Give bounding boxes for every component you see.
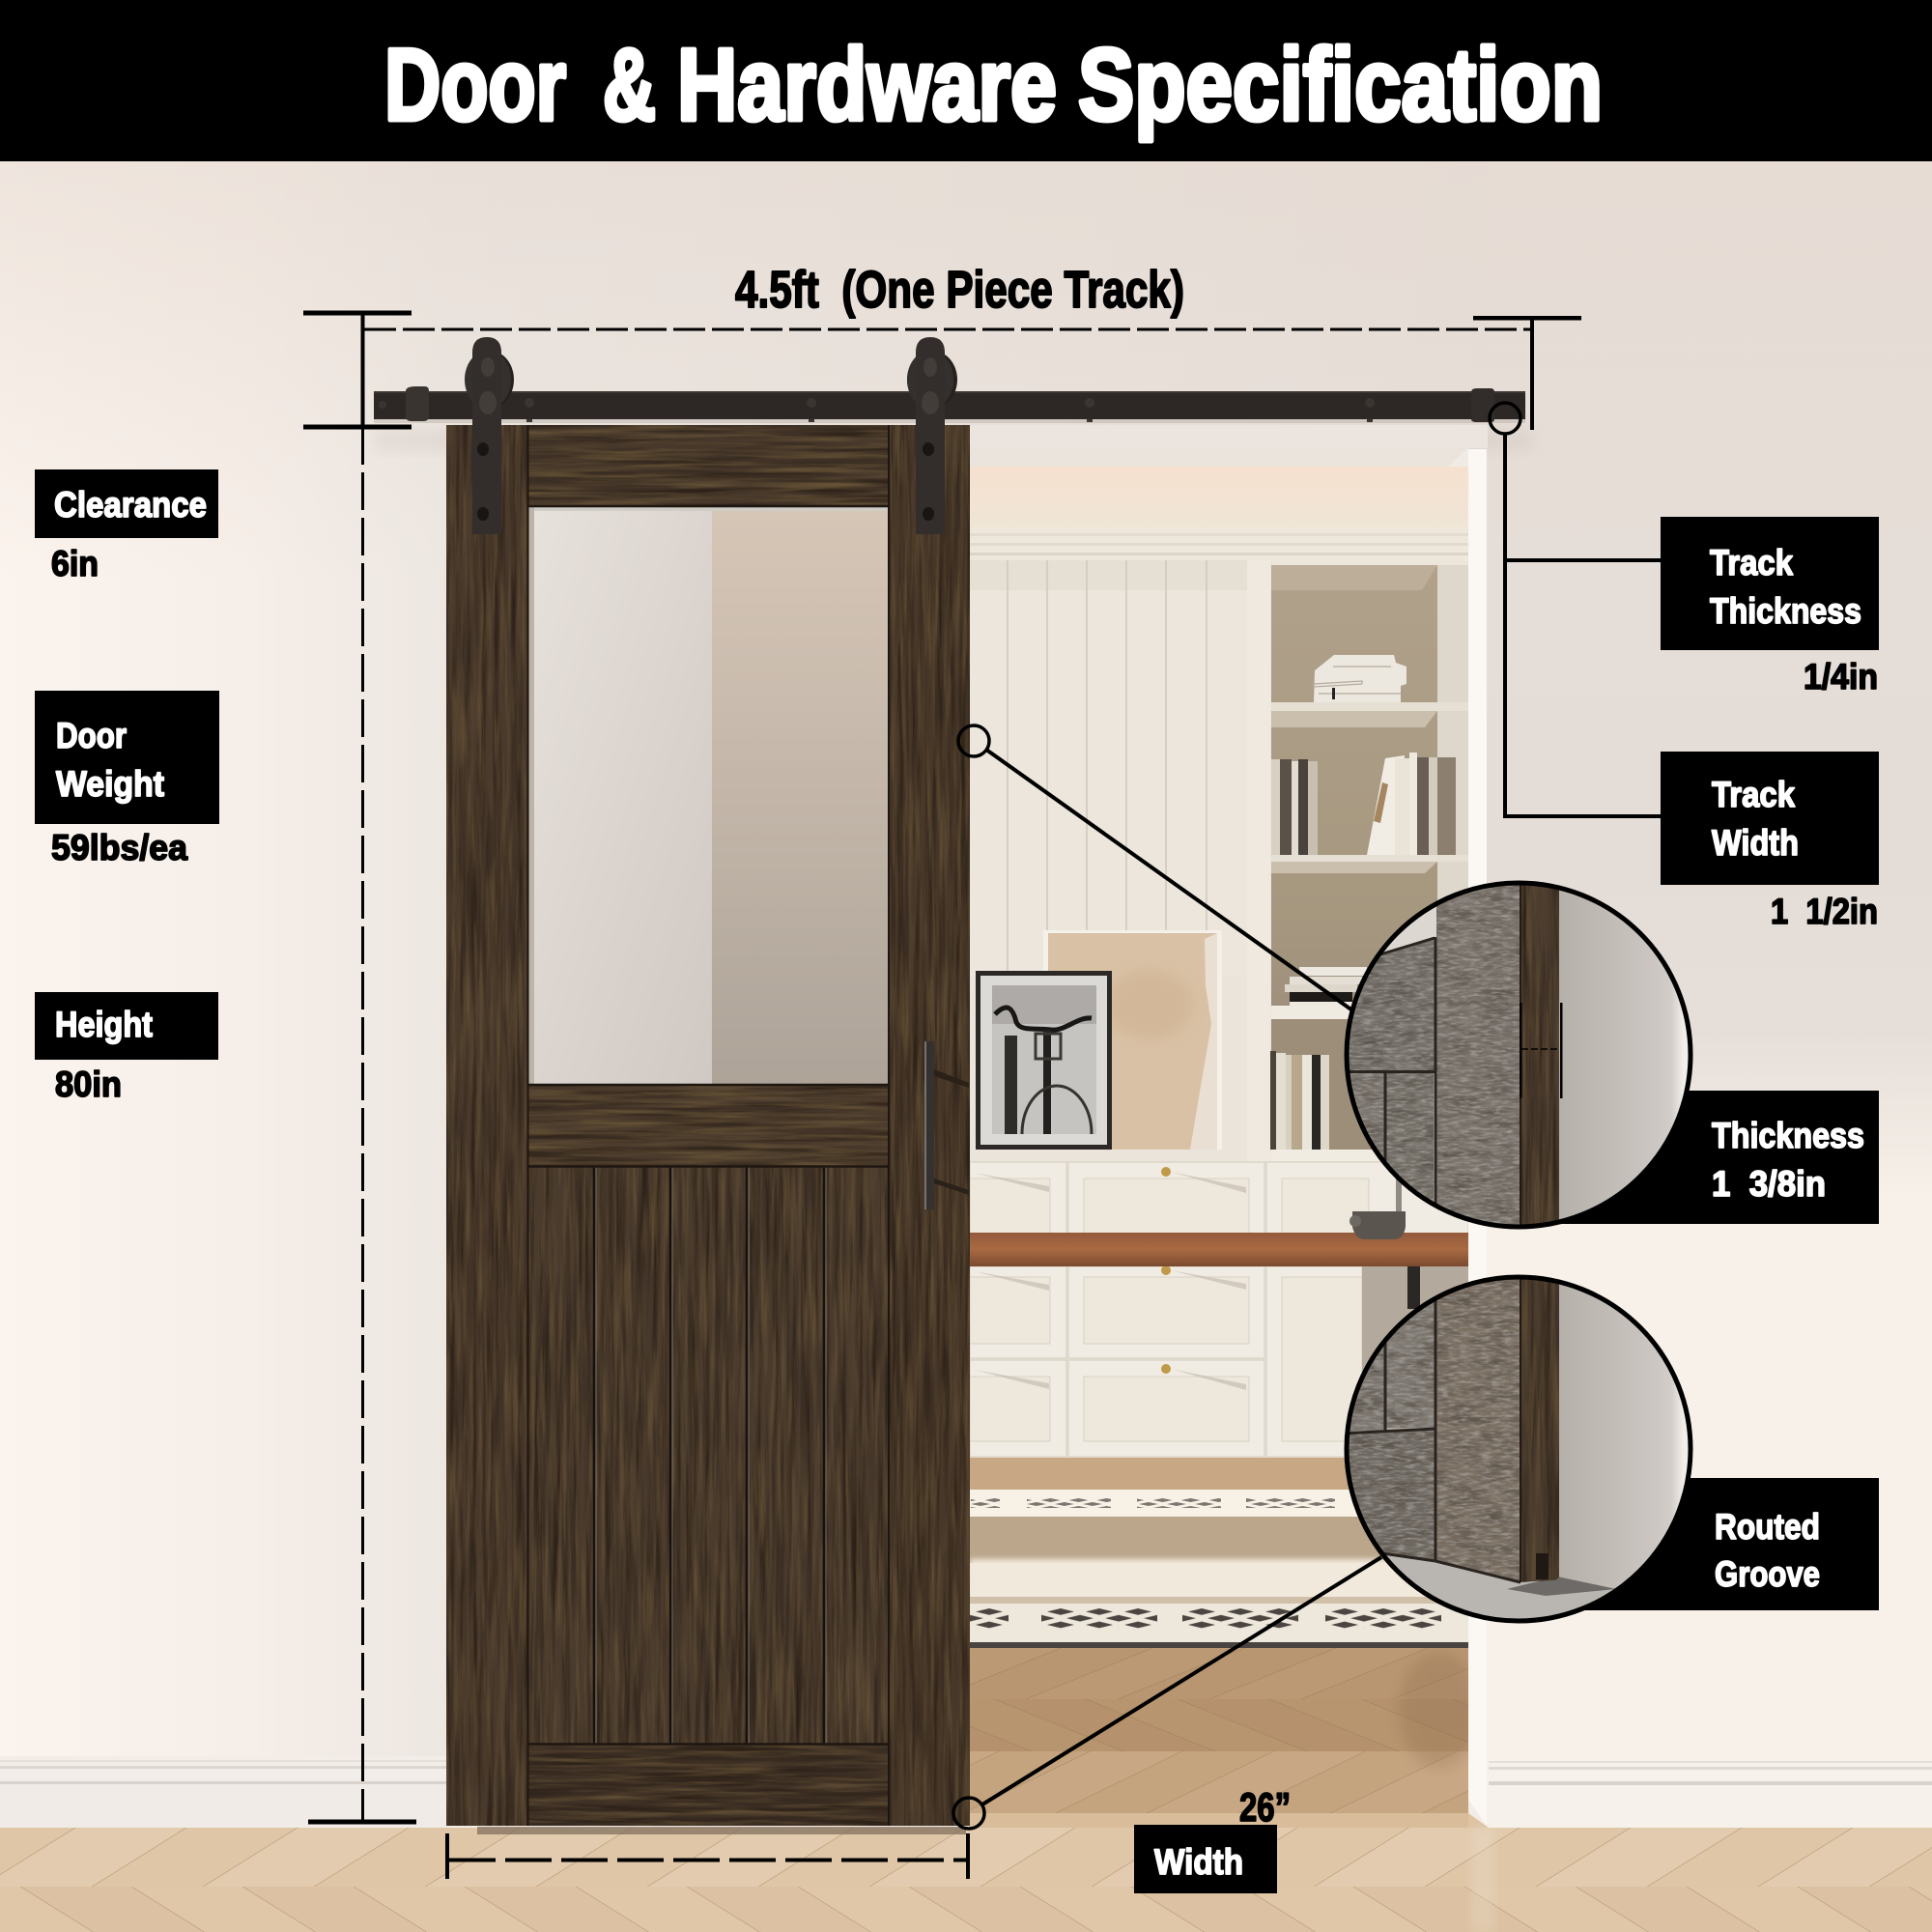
track stops bbox=[406, 386, 429, 421]
label: clearance: Clearance bbox=[54, 485, 207, 525]
label: width: 26” bbox=[1239, 1784, 1291, 1830]
header band bbox=[0, 0, 1932, 161]
title: Hardware bbox=[677, 28, 1057, 142]
label: clearance bbox=[35, 469, 218, 583]
track marker circle and leader lines bbox=[1490, 403, 1661, 818]
label: track width bbox=[1661, 752, 1879, 931]
grey stile bbox=[1436, 1273, 1520, 1582]
beadboard wall bbox=[1007, 560, 1208, 971]
title: Door bbox=[384, 28, 566, 142]
routed groove marker circle and leader bbox=[953, 1557, 1381, 1829]
barn door bbox=[446, 425, 970, 1826]
door handle bbox=[924, 1041, 969, 1209]
text: thickness: Thickness bbox=[1712, 1116, 1864, 1155]
thickness dimension marks bbox=[1520, 1003, 1563, 1098]
room interior seen through the opening bbox=[970, 447, 1480, 1828]
text: routed groove: Routed bbox=[1715, 1507, 1820, 1547]
label: track thickness: 1/4in bbox=[1804, 657, 1878, 696]
door slab bbox=[446, 425, 970, 1826]
rug bbox=[970, 1490, 1468, 1648]
left hanger strap bbox=[465, 337, 514, 534]
baseboard right bbox=[1489, 1758, 1932, 1828]
label: height bbox=[35, 992, 218, 1104]
label: height: Height bbox=[55, 1005, 153, 1044]
grey stile bbox=[1436, 879, 1520, 1232]
label: door weight: Weight bbox=[56, 764, 164, 804]
lower cabinets bbox=[970, 1161, 1468, 1460]
title bbox=[384, 28, 1603, 142]
label box: thickness bbox=[1546, 1091, 1879, 1224]
beige framed art bbox=[1043, 930, 1222, 1150]
text: thickness: 1 3/8in bbox=[1712, 1164, 1826, 1204]
track length label: 4.5ft (One Piece Track) bbox=[735, 261, 1184, 319]
wooden counter bbox=[970, 1233, 1468, 1266]
label: width bbox=[1134, 1784, 1291, 1893]
label: door weight bbox=[35, 691, 219, 867]
interior floor bbox=[970, 1458, 1480, 1828]
label: track thickness: Thickness bbox=[1710, 591, 1861, 631]
label: track thickness: Track bbox=[1710, 543, 1793, 582]
dimension: door height bbox=[303, 313, 416, 1824]
text: routed groove bbox=[1715, 1507, 1820, 1594]
door edge bbox=[1520, 1273, 1559, 1582]
framed bicycle photo bbox=[976, 971, 1112, 1150]
dimension: door width bbox=[445, 1833, 970, 1879]
vertical planks bbox=[528, 1167, 889, 1744]
detail circle: door thickness bbox=[1343, 879, 1695, 1232]
bookcase light side panel bbox=[1247, 560, 1270, 1161]
left stile bbox=[446, 425, 527, 1826]
label: clearance: 6in bbox=[51, 544, 99, 583]
routed groove notch bbox=[1536, 1553, 1548, 1579]
text: routed groove: Groove bbox=[1715, 1554, 1820, 1594]
label: door weight: 59lbs/ea bbox=[51, 828, 187, 867]
dimension: track length bbox=[303, 311, 1581, 430]
grey panels bbox=[1343, 1273, 1385, 1432]
label: track thickness bbox=[1661, 517, 1879, 696]
grey panels bbox=[1343, 938, 1435, 1070]
floor bbox=[0, 1813, 1932, 1932]
middle rail bbox=[528, 1085, 888, 1166]
text: thickness bbox=[1712, 1116, 1864, 1204]
detail circle: routed groove bbox=[1343, 1273, 1694, 1628]
glass panel bbox=[528, 506, 889, 1084]
track rail bbox=[374, 386, 1525, 423]
track bolts bbox=[379, 398, 1375, 422]
door edge bbox=[1520, 879, 1559, 1232]
thickness marker circle and leader bbox=[958, 725, 1352, 1010]
grey bowl bbox=[1350, 1140, 1406, 1239]
soffit and warm ceiling bbox=[970, 467, 1468, 555]
label: width: Width bbox=[1154, 1842, 1243, 1882]
door jamb bbox=[970, 425, 1488, 1826]
baseboard left bbox=[0, 1756, 446, 1828]
label: track width: Width bbox=[1712, 823, 1799, 863]
bottom rail bbox=[528, 1745, 889, 1826]
label: track width: Track bbox=[1712, 775, 1795, 814]
top rail bbox=[528, 425, 889, 506]
bookcase bbox=[1270, 565, 1468, 1150]
label: track width: 1 1/2in bbox=[1771, 892, 1878, 931]
right stile bbox=[889, 425, 970, 1826]
title: Specification bbox=[1078, 28, 1603, 142]
title: & bbox=[603, 28, 656, 142]
floor bbox=[1343, 1536, 1694, 1628]
label box: routed groove bbox=[1546, 1478, 1879, 1610]
books bbox=[1270, 655, 1456, 1150]
label: door weight: Door bbox=[56, 716, 127, 755]
plank grooves bbox=[527, 425, 889, 1826]
label: height: 80in bbox=[55, 1065, 122, 1104]
right hanger strap bbox=[907, 337, 957, 534]
brass knobs and shadows bbox=[974, 1167, 1246, 1390]
